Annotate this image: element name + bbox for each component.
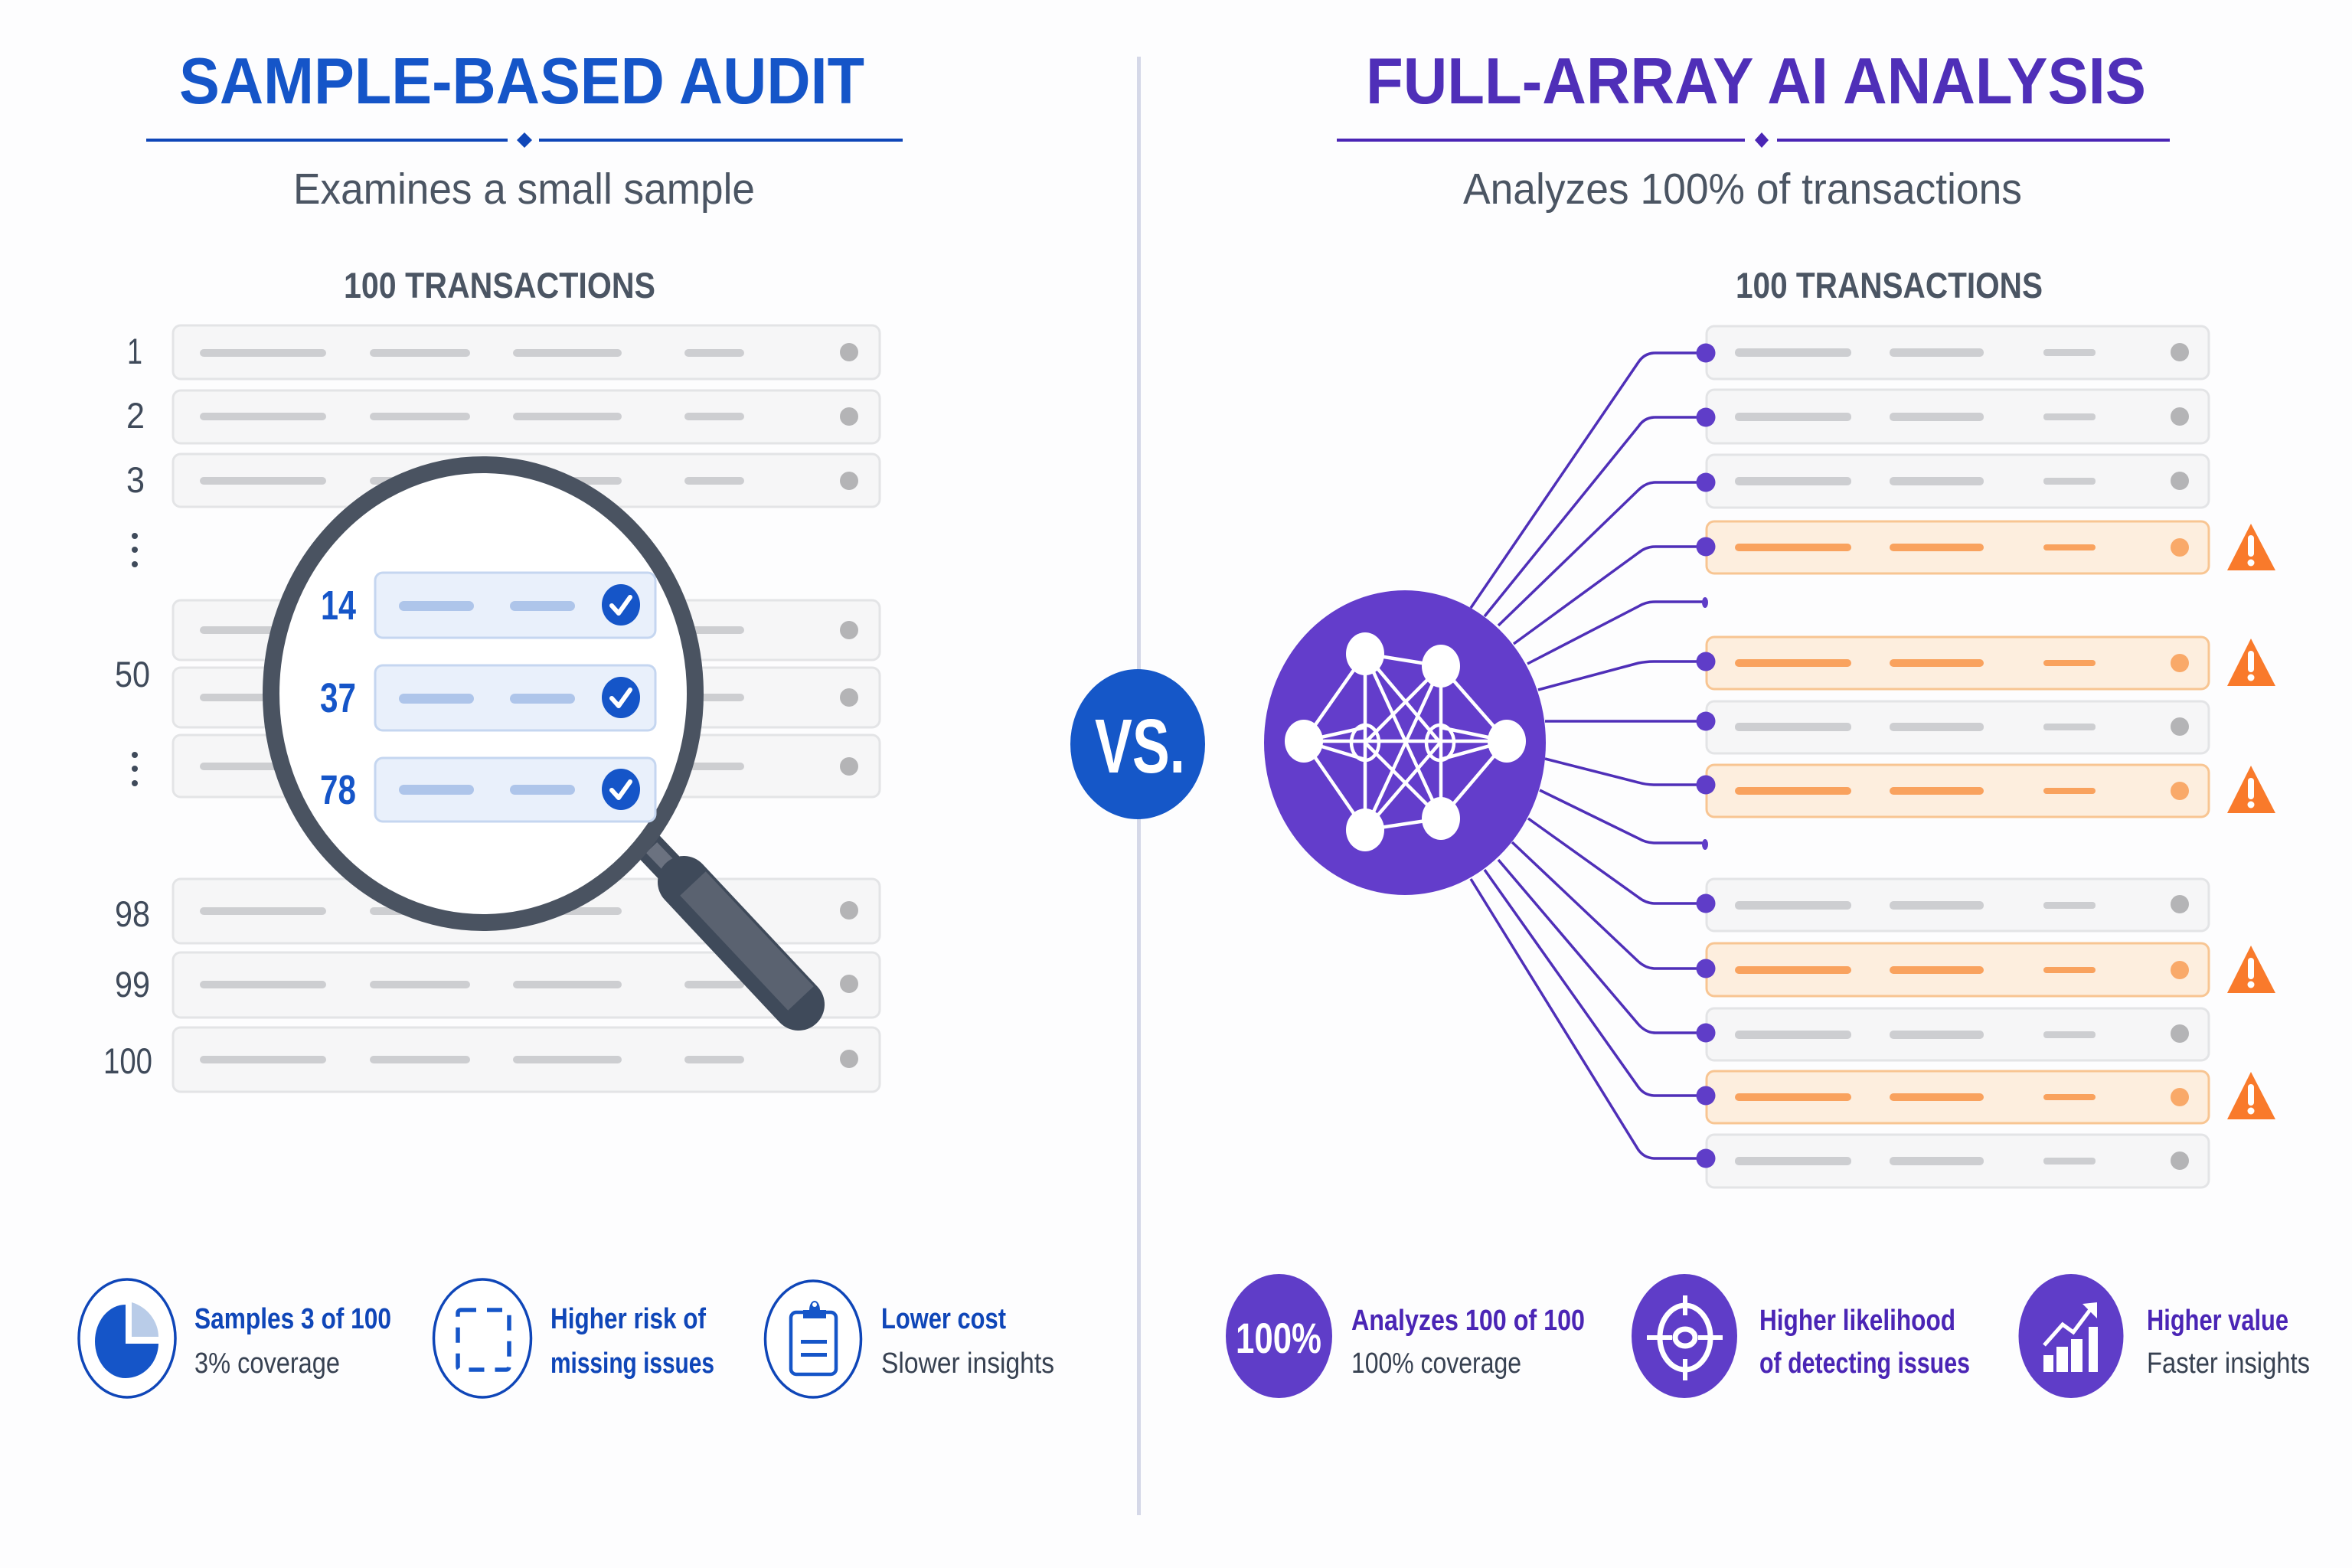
stats: samples 3 of 100: 3% coverage: [194, 1348, 340, 1380]
icon: dashed square: [433, 1279, 531, 1397]
subtitle: Analyzes 100% of transactions: [1463, 165, 2022, 214]
title underline with diamond: [146, 132, 903, 148]
transaction rows: [173, 325, 880, 1092]
row numbers: 2: [126, 395, 145, 436]
icon: target: [1632, 1274, 1737, 1398]
sampled row 14: [321, 573, 655, 638]
sampled row 78: 78: [320, 767, 356, 813]
panel: full-array AI analysis: [1226, 45, 2310, 1398]
magnifier lens: [271, 465, 695, 923]
stats: analyzes 100 of 100: [1226, 1274, 1585, 1398]
stats: higher likelihood: of detecting issues: [1759, 1348, 1970, 1380]
stats: higher likelihood: Higher likelihood: [1759, 1305, 1955, 1337]
row numbers: 100: [103, 1040, 152, 1081]
row numbers: [103, 331, 152, 1081]
stats: higher value: Higher value: [2147, 1305, 2288, 1337]
subtitle: Examines a small sample: [293, 165, 755, 214]
title: sample-based audit: SAMPLE-BASED AUDIT: [179, 45, 864, 118]
network nodes: [1285, 632, 1526, 851]
sampled row 14: 14: [321, 583, 356, 629]
stats: analyzes 100 of 100: Analyzes 100 of 100: [1351, 1305, 1585, 1337]
stats: lower cost: [766, 1281, 1054, 1397]
row numbers: 3: [126, 459, 145, 500]
stats: lower cost: Lower cost: [881, 1303, 1006, 1335]
title underline with diamond: [1337, 132, 2170, 148]
warning icons: [2227, 524, 2275, 1119]
AI neural network circle: [1264, 590, 1546, 895]
sampled row 78: [320, 758, 655, 822]
center divider: [1137, 57, 1141, 1515]
icon: pie chart: [79, 1279, 175, 1397]
stats: analyzes 100 of 100: 100% coverage: [1351, 1348, 1521, 1380]
stats: higher likelihood: [1632, 1274, 1970, 1398]
table heading: 100 TRANSACTIONS: [344, 265, 655, 305]
stats: higher risk: missing issues: [550, 1348, 714, 1380]
row numbers: 99: [115, 964, 150, 1004]
title: full-array AI analysis: FULL-ARRAY AI ANALYSIS: [1366, 45, 2146, 118]
icon: clipboard: [766, 1281, 861, 1397]
VS badge: VS.: [1095, 704, 1185, 789]
magnifier handle: [647, 844, 801, 1004]
network edges: [1304, 654, 1507, 830]
table heading: 100 TRANSACTIONS: [1736, 265, 2043, 305]
stats: higher value: [2018, 1274, 2310, 1398]
magnifying glass: [271, 465, 801, 1004]
icon: 100 percent: [1226, 1274, 1332, 1398]
sampled row 37: [320, 665, 655, 730]
analyzed rows: [1707, 326, 2209, 1187]
icon: 100 percent: 100%: [1236, 1314, 1321, 1362]
stats: samples 3 of 100: [79, 1279, 391, 1397]
row numbers: 50: [115, 654, 150, 694]
stats: higher risk: Higher risk of: [550, 1303, 706, 1335]
stats: lower cost: Slower insights: [881, 1348, 1054, 1380]
connector lines with nodes: [1471, 343, 1715, 1168]
icon: rising chart: [2018, 1274, 2124, 1398]
stats: higher value: Faster insights: [2147, 1348, 2310, 1380]
row numbers: 98: [115, 893, 150, 934]
sampled row 37: 37: [320, 675, 356, 721]
stats: samples 3 of 100: Samples 3 of 100: [194, 1303, 391, 1335]
stats: higher risk: [433, 1279, 714, 1397]
panel: sample-based audit: [79, 45, 1054, 1397]
row numbers: 1: [127, 331, 142, 371]
VS badge: [1070, 669, 1205, 819]
